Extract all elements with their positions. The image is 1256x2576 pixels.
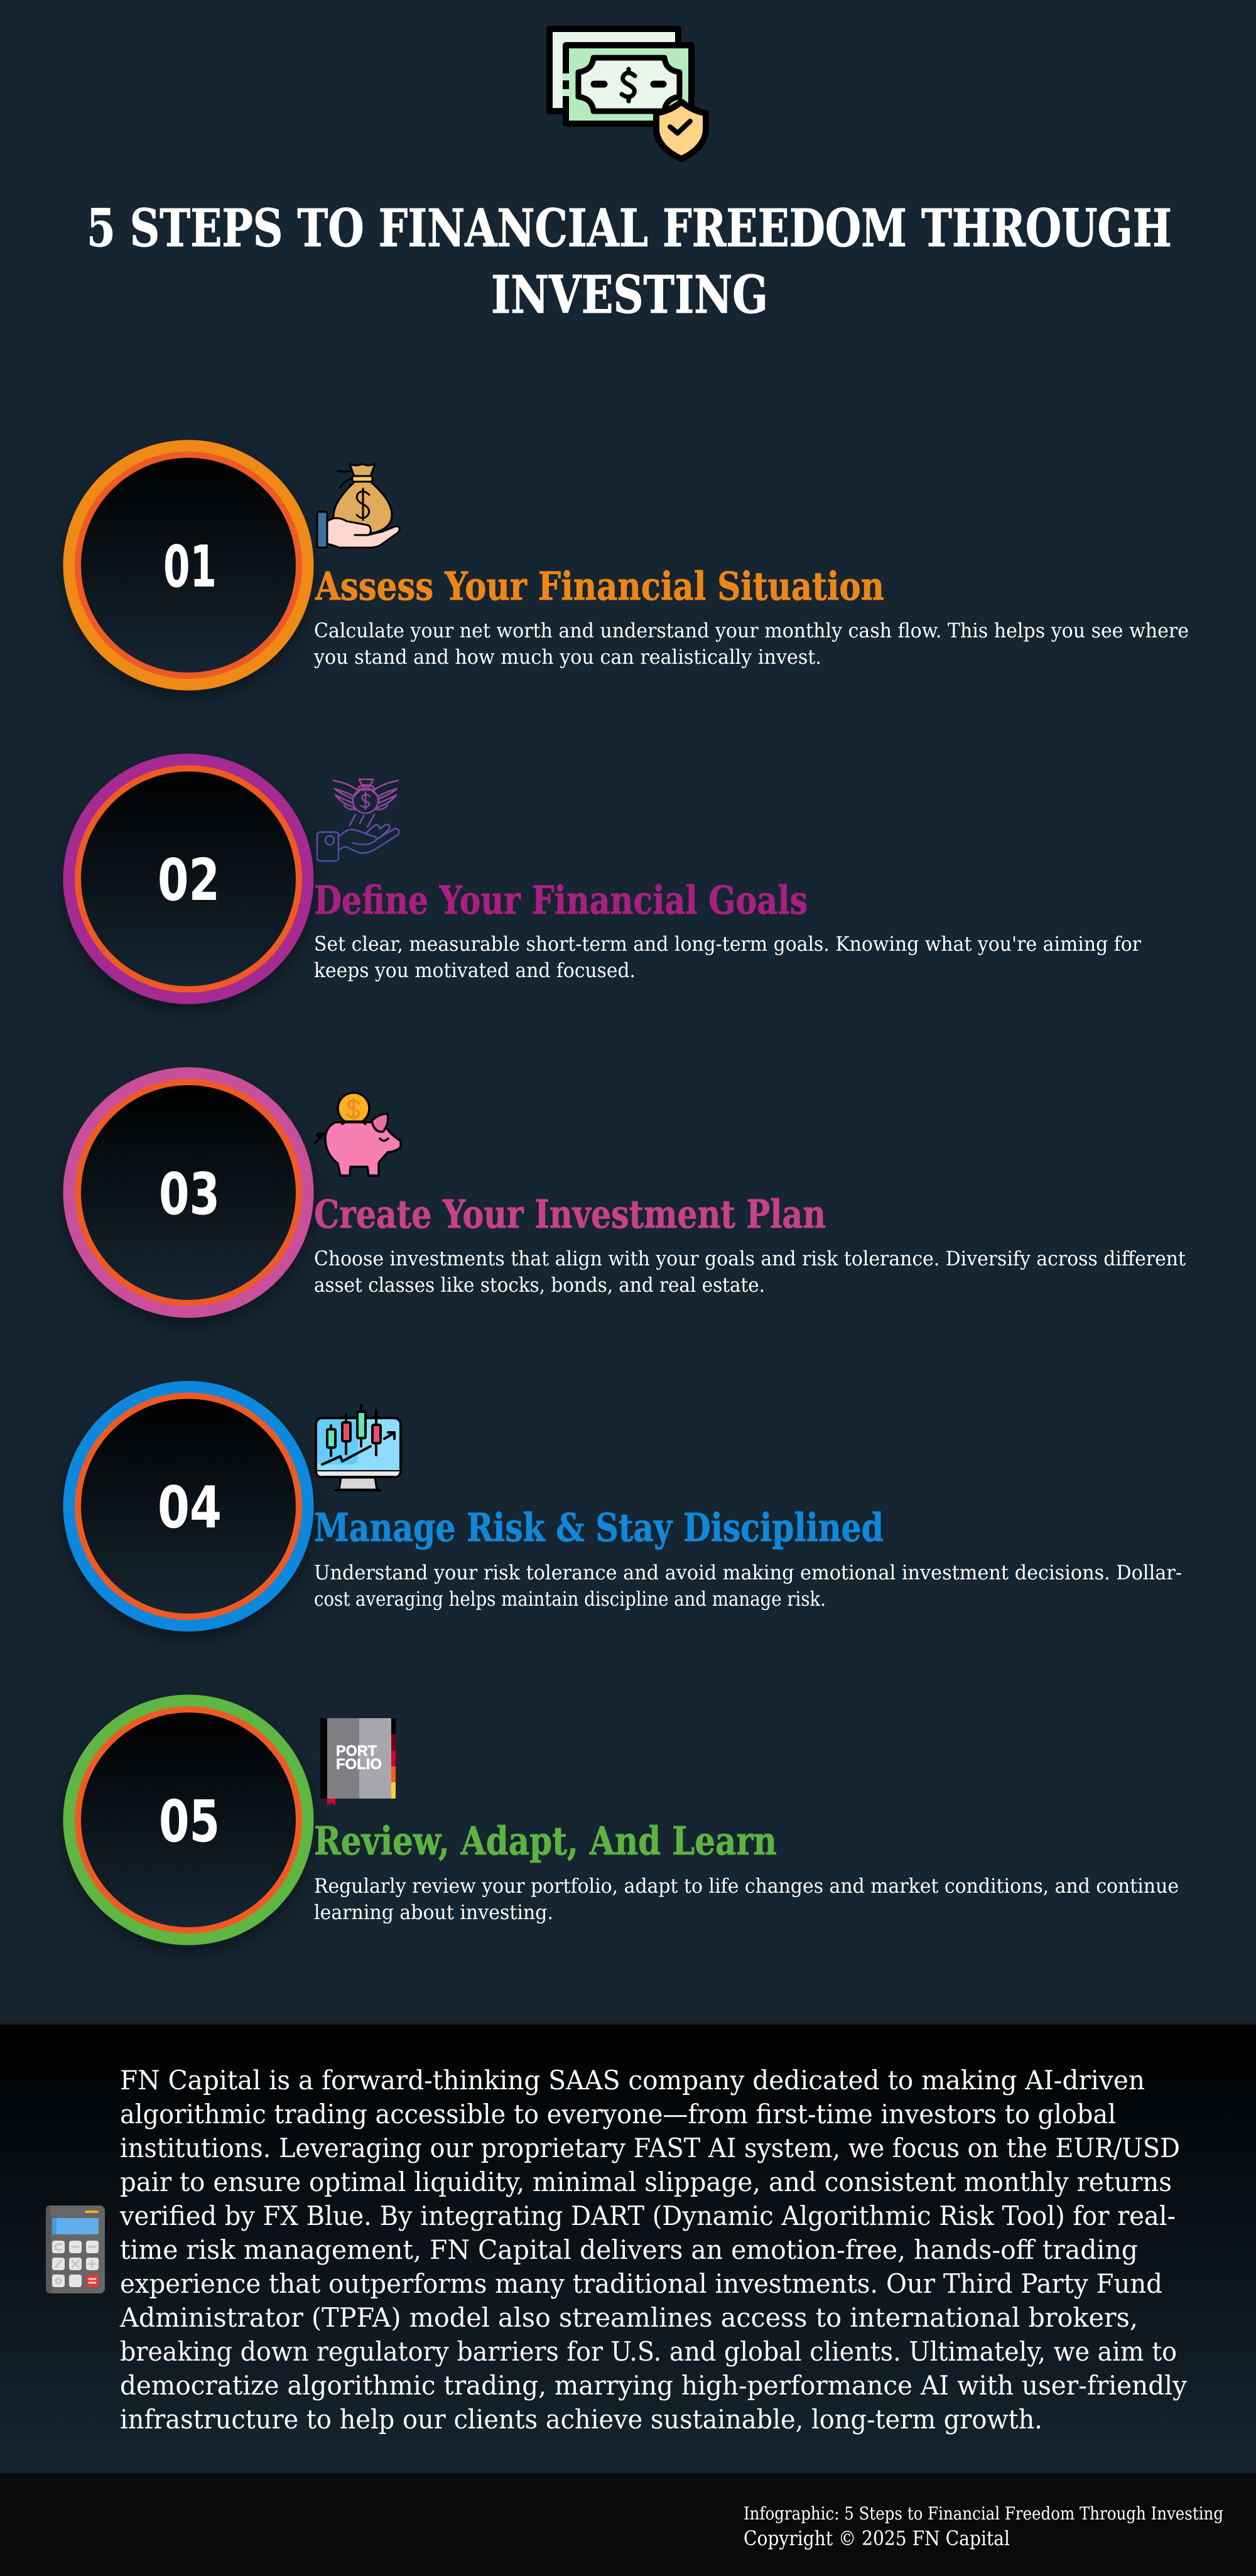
number circle 05 — [63, 1694, 314, 1946]
text block: FN Capital is a forward-thinking SAAS company dedicated to making AI-driven — [120, 2065, 1145, 2096]
text block: time risk management, FN Capital delivers an emotion-free, hands-off trading — [120, 2234, 1138, 2265]
text block: experience that outperforms many traditional investments. Our Third Party Fund — [120, 2268, 1162, 2299]
heading: Review, Adapt, And Learn — [314, 1818, 777, 1864]
heading: Define Your Financial Goals — [314, 877, 808, 923]
number circle 03: 03 — [159, 1161, 220, 1228]
icon: piggy bank with coin — [315, 1093, 401, 1176]
number circle 01: 01 — [163, 533, 217, 600]
panel: step 4 — [63, 1381, 1182, 1632]
icon: portfolio book: PORT — [336, 1743, 377, 1760]
number circle 05: 05 — [159, 1788, 220, 1855]
heading: Assess Your Financial Situation — [315, 563, 884, 609]
icon: portfolio book: FOLIO — [336, 1756, 382, 1773]
description: learning about investing. — [314, 1900, 553, 1924]
footer: Copyright © 2025 FN Capital — [744, 2526, 1010, 2550]
description: Calculate your net worth and understand your monthly cash flow. This helps you see where — [314, 619, 1189, 642]
text block: verified by FX Blue. By integrating DART (Dynamic Algorithmic Risk Tool) for real- — [119, 2200, 1176, 2231]
text block: infrastructure to help our clients achieve sustainable, long-term growth. — [120, 2404, 1042, 2435]
number circle 02 — [63, 754, 314, 1004]
text block: breaking down regulatory barriers for U.S. and global clients. Ultimately, we aim to — [120, 2336, 1177, 2367]
description: cost averaging helps maintain discipline and manage risk. — [314, 1587, 826, 1611]
icon: portfolio book — [320, 1718, 396, 1805]
panel: step 3 — [63, 1068, 1186, 1318]
description — [314, 932, 1142, 982]
description — [314, 1561, 1182, 1611]
text block: Administrator (TPFA) model also streamlines access to international brokers, — [119, 2302, 1138, 2333]
description: asset classes like stocks, bonds, and real estate. — [314, 1273, 765, 1297]
heading: Create Your Investment Plan — [314, 1191, 826, 1237]
title — [87, 198, 1172, 325]
text block: pair to ensure optimal liquidity, minimal slippage, and consistent monthly returns — [120, 2167, 1172, 2197]
panel: step 1 — [63, 440, 1189, 691]
icon: monitor with candlesticks — [316, 1405, 401, 1490]
description — [314, 1874, 1179, 1924]
panel: step 5 — [63, 1694, 1179, 1946]
description: Choose investments that align with your goals and risk tolerance. Diversify across different — [314, 1247, 1186, 1270]
description — [313, 619, 1189, 669]
icon: money bag on hand — [317, 464, 399, 548]
number circle 01 — [63, 440, 314, 691]
number circle 02: 02 — [158, 847, 220, 914]
description — [314, 1247, 1186, 1297]
text block: algorithmic trading accessible to everyone—from first-time investors to global — [120, 2099, 1116, 2130]
panel: step 2 — [63, 754, 1142, 1004]
title: INVESTING — [491, 265, 768, 325]
description: Understand your risk tolerance and avoid making emotional investment decisions. Dollar- — [314, 1561, 1182, 1584]
text block: democratize algorithmic trading, marrying high-performance AI with user-friendly — [120, 2370, 1187, 2401]
footer — [0, 2473, 1256, 2576]
number circle 04 — [63, 1381, 314, 1632]
icon: banknotes with shield — [550, 29, 706, 159]
description: Regularly review your portfolio, adapt to life changes and market conditions, and continue — [314, 1874, 1179, 1898]
description: Set clear, measurable short-term and long-term goals. Knowing what you're aiming for — [314, 932, 1142, 956]
icon: winged money bag over hand — [317, 779, 399, 861]
text block — [119, 2065, 1187, 2435]
panel: about FN Capital — [0, 2022, 1256, 2473]
description: keeps you motivated and focused. — [314, 958, 636, 982]
number circle 03 — [63, 1068, 314, 1318]
number circle 04: 04 — [158, 1474, 222, 1541]
icon: calculator — [46, 2205, 105, 2293]
text block: institutions. Leveraging our proprietary FAST AI system, we focus on the EUR/USD — [120, 2133, 1180, 2163]
heading: Manage Risk & Stay Disciplined — [314, 1505, 884, 1550]
description: you stand and how much you can realistically invest. — [313, 645, 821, 669]
